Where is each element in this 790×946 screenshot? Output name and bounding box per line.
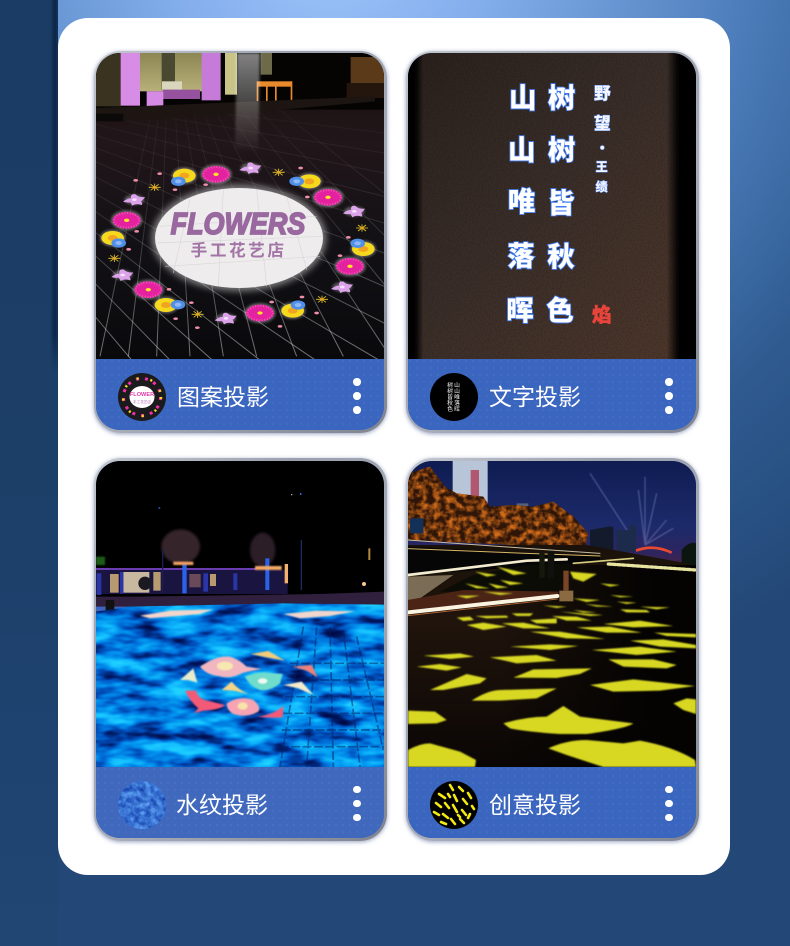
skyline and bridge [517,503,696,565]
card: creative projection [406,458,698,841]
wall [408,53,696,359]
caption bar [96,359,384,430]
poem title: · [596,137,609,156]
pavilion and trees [96,493,370,595]
poem columns: 色 [546,288,574,328]
distant pale patterns [140,609,355,618]
poem columns [506,76,575,328]
koi and lotus [180,651,318,718]
poem title: 绩 [596,178,608,195]
photo: flower logo projected on floor [96,53,384,359]
icon: poem thumbnail [430,373,478,421]
projected circle with logo [152,185,326,291]
label: 创意投影 [489,786,581,820]
card: pattern projection [94,50,386,433]
background left stripe [0,0,58,946]
photo: water ripple on plaza [96,461,384,767]
lit steps and rails [408,540,696,615]
floor tile lines [96,114,384,359]
poem columns: 落 [507,233,535,273]
icon: poem thumbnail: 山 [454,380,460,389]
floor [96,53,384,359]
poem columns: 唯 [508,179,535,219]
menu dots [665,378,673,414]
card: text projection [406,50,698,433]
tower [453,461,488,506]
poem title: 野 [594,80,611,104]
ground strip [96,591,384,606]
icon: flower logo thumbnail [118,373,166,421]
photo: poem projected on wall [408,53,696,359]
menu dots [353,378,361,414]
red seal: 焰 [592,299,611,327]
projected leaves [408,566,696,767]
caption bar [96,767,384,838]
menu dots [665,786,673,821]
poem title: 望 [594,110,611,134]
poem title [594,80,611,195]
icon: poem thumbnail: 落 [454,398,460,407]
light beam [235,53,260,150]
poem columns: 皆 [547,181,575,221]
poem columns: 秋 [547,234,575,274]
icon: poem thumbnail: 秋 [447,398,453,407]
icon: poem thumbnail: 树 [447,386,453,395]
searchlight beams [590,473,673,545]
menu dots [353,786,361,821]
card: water projection [94,458,386,841]
paving grid [280,626,384,767]
projected circle with logo: FLOWERS [171,207,306,241]
icon: poem thumbnail: 色 [447,404,453,413]
icon: flower logo thumbnail: 手工花艺店 [133,399,151,405]
wall shadows [408,53,696,359]
caption bar [408,767,696,838]
label: 水纹投影 [176,786,268,820]
poem columns: 树 [548,76,575,116]
white panel [58,18,730,875]
poem columns: 山 [508,127,535,167]
caption bar [408,359,696,430]
water ripple surface [96,603,384,767]
icon: yellow leaves thumbnail [430,781,478,829]
icon: flower logo thumbnail: FLOWER [130,392,154,398]
icon: poem thumbnail: 树 [447,380,453,389]
back wall and shop interior [96,53,384,121]
poem columns: 晖 [506,288,534,328]
stripe shadow edge [52,0,58,362]
icon: water texture thumbnail [118,781,166,829]
label: 图案投影 [177,378,269,412]
icon: poem thumbnail: 晖 [454,404,460,413]
poem columns: 树 [548,127,575,167]
projected circle with logo: 手工花艺店 [191,237,284,261]
night sky [408,461,696,567]
walkway [408,545,696,767]
poem title: 王 [596,158,608,175]
tree canopy [408,466,588,548]
night sky [96,461,384,604]
icon: poem thumbnail: 唯 [454,392,460,401]
icon: poem thumbnail: 皆 [447,392,453,401]
people and post [539,551,573,601]
poem columns: 山 [509,76,536,116]
photo: ginkgo leaves projected on riverside walkway [408,461,696,767]
flower ring [100,162,376,329]
icon: poem thumbnail: 山 [454,386,460,395]
label: 文字投影 [489,378,581,412]
